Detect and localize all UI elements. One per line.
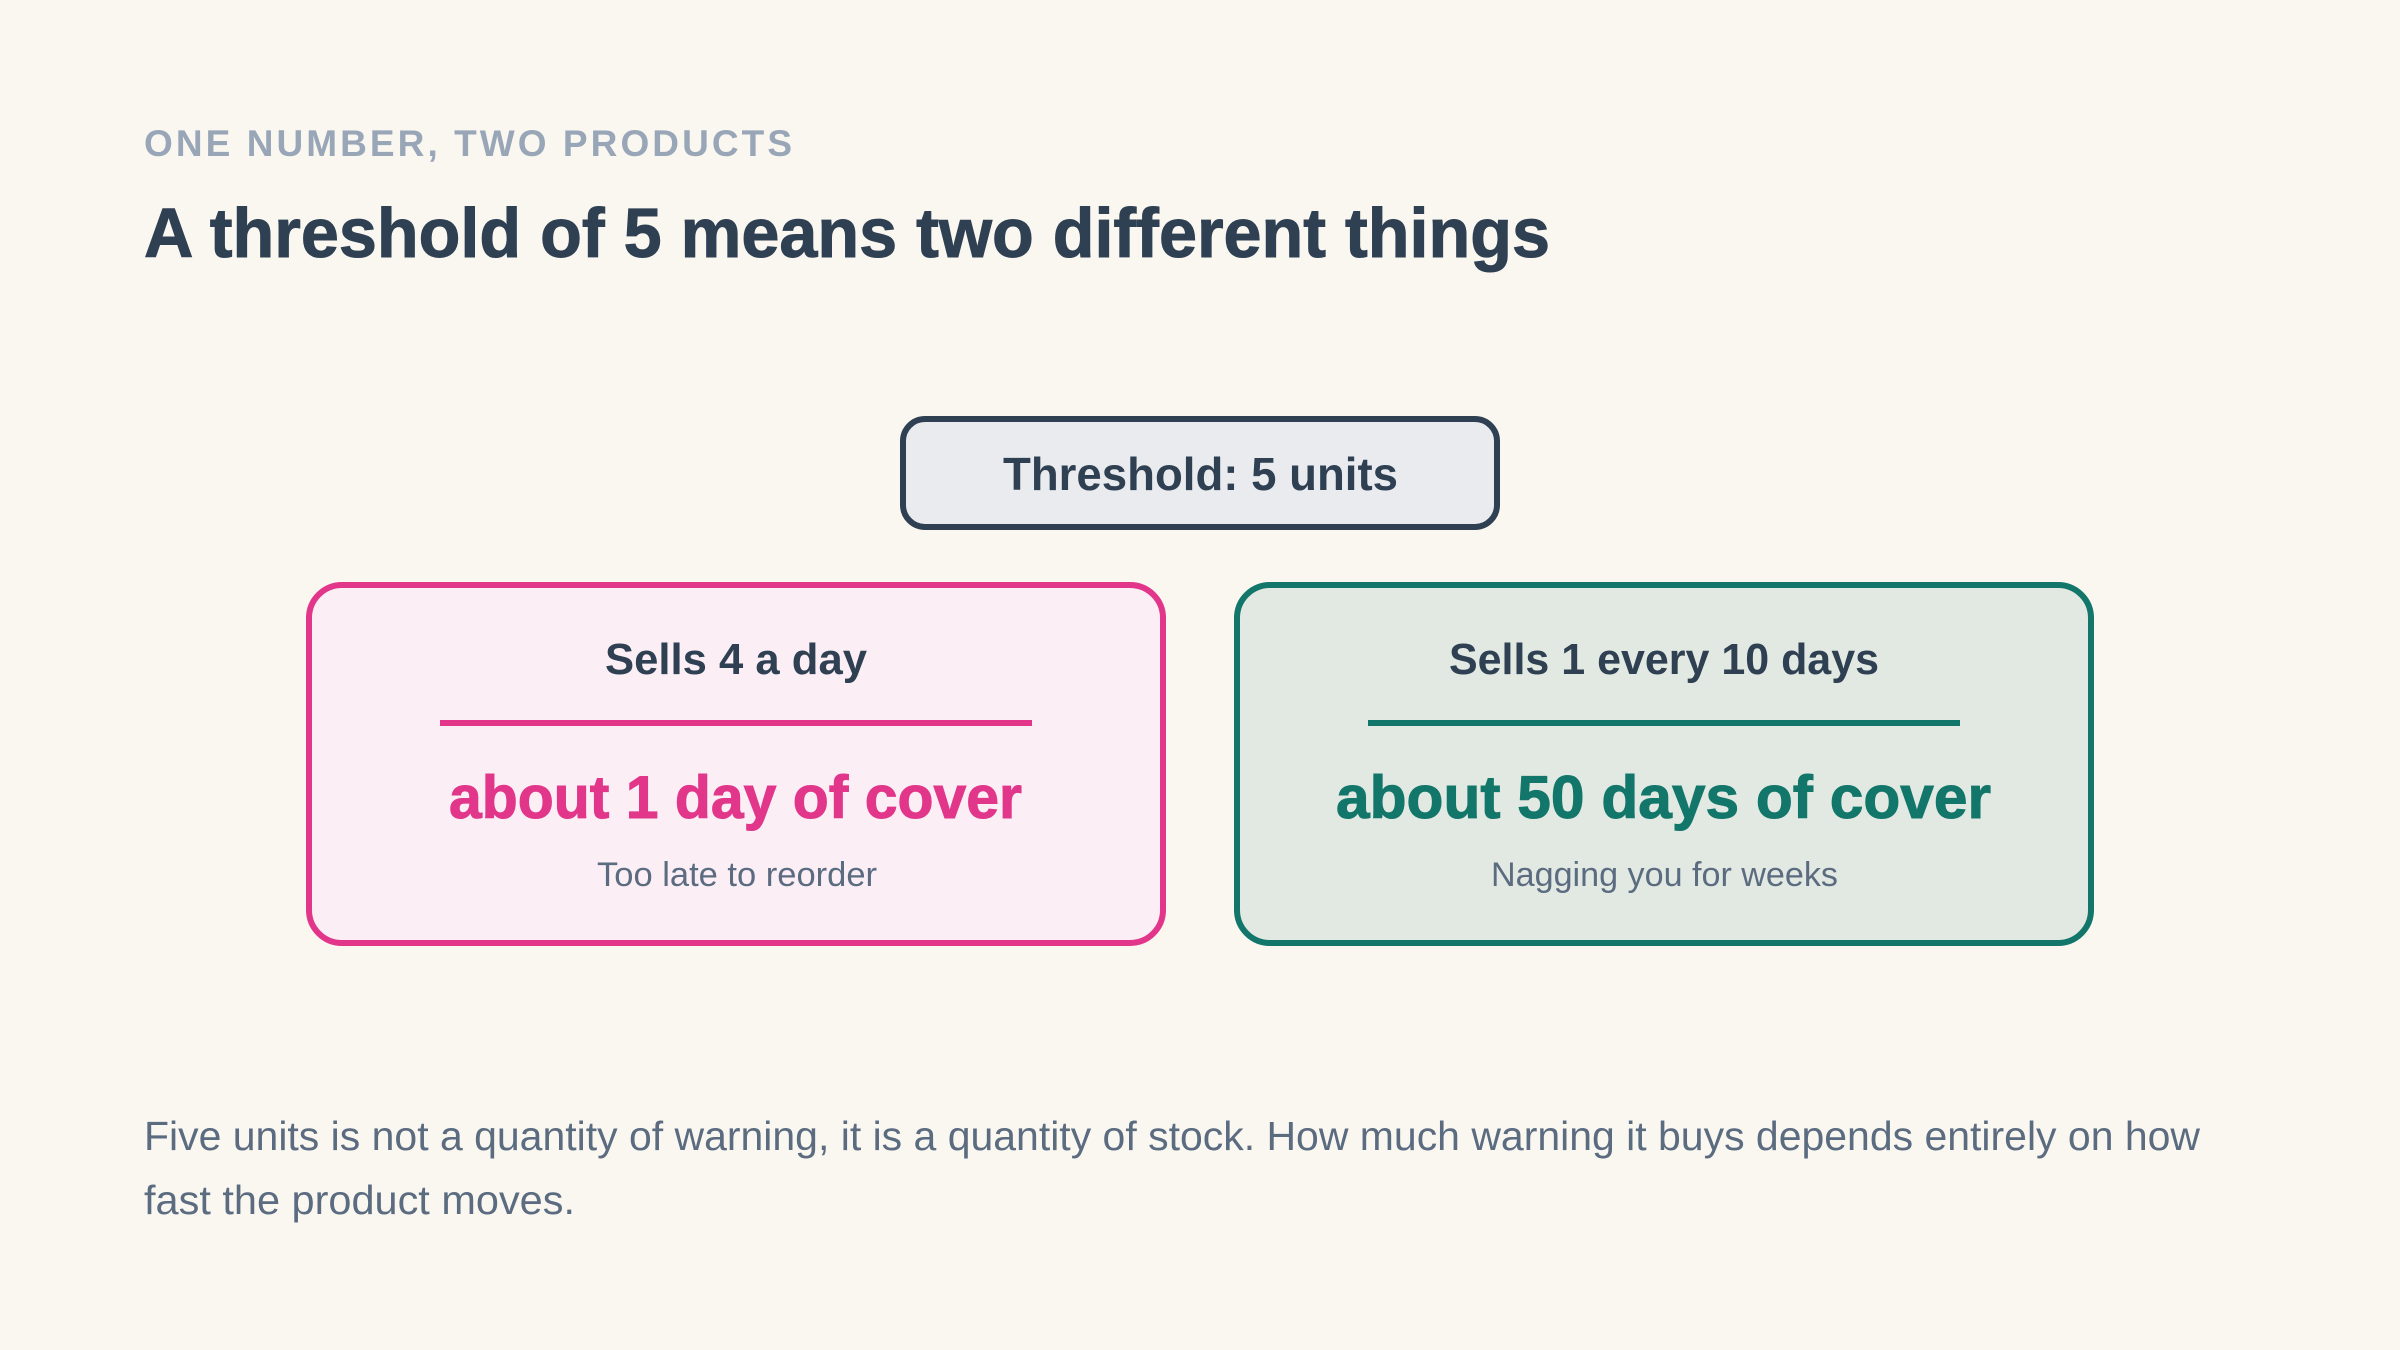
panel: slow seller [1237, 585, 2091, 943]
result: about 50 days of cover: about 50 days of cover [1336, 764, 1991, 831]
explanatory text [144, 1113, 2200, 1223]
eyebrow label: ONE NUMBER, TWO PRODUCTS [144, 123, 792, 164]
explanatory text: Five units is not a quantity of warning, it is a quantity of stock. How much warning it buys depends entirely on how [144, 1113, 2200, 1159]
divider: pink [440, 720, 1032, 726]
rate heading: sells 4 a day: Sells 4 a day [605, 635, 868, 684]
note: too late to reorder: Too late to reorder [597, 856, 877, 894]
panel: fast seller [309, 585, 1163, 943]
note: nagging you for weeks: Nagging you for weeks [1491, 856, 1838, 894]
threshold box: Threshold: 5 units [1003, 448, 1398, 500]
threshold box [903, 419, 1497, 527]
explanatory text: fast the product moves. [144, 1177, 575, 1223]
title: A threshold of 5 means two different things [144, 194, 1550, 272]
rate heading: sells 1 every 10 days: Sells 1 every 10 days [1449, 635, 1879, 684]
divider: teal [1368, 720, 1960, 726]
result: about 1 day of cover: about 1 day of cover [449, 764, 1022, 831]
